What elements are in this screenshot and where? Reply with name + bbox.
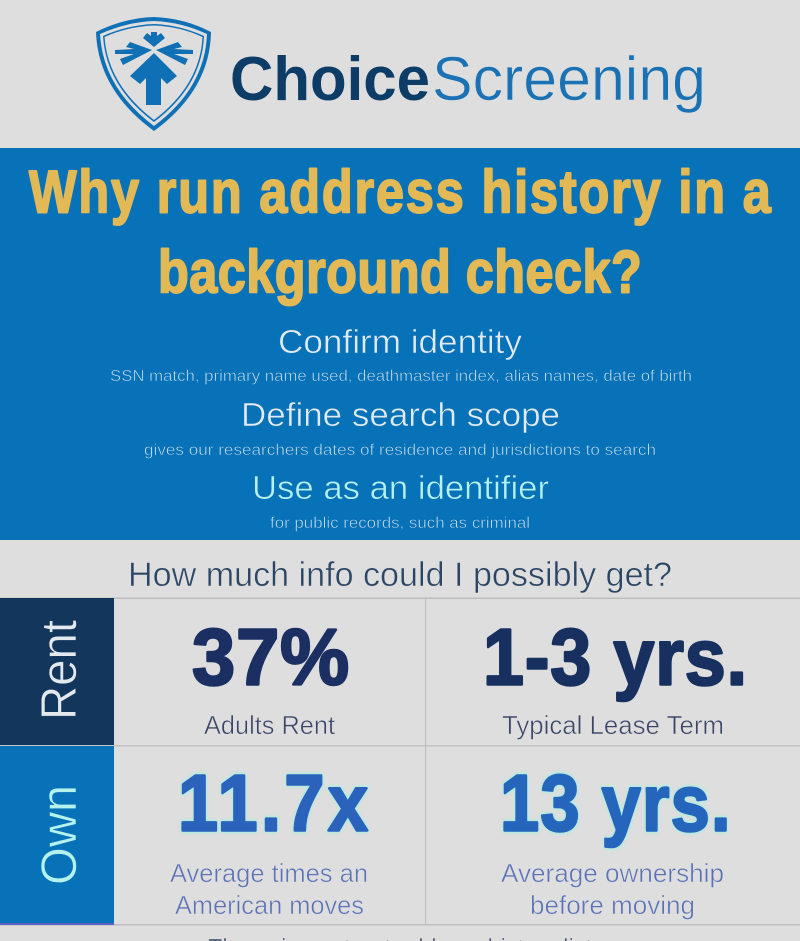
text block: confirm identity: Confirm identity <box>278 323 523 360</box>
stat: adults rent: Adults Rent <box>204 710 336 740</box>
heading: background check? <box>158 238 642 305</box>
stat: lease term: Typical Lease Term <box>502 710 724 740</box>
stat: times an American moves: American moves <box>175 890 364 920</box>
stat: adults rent: 37% <box>192 612 349 702</box>
stat: ownership <box>500 758 731 920</box>
panel: why run address history <box>0 148 800 540</box>
icon: shield <box>96 17 211 131</box>
stat: lease term: 1-3 yrs. <box>483 613 747 702</box>
heading: Why run address history in a <box>29 158 772 225</box>
panel: rent label <box>0 598 114 745</box>
text block: define search scope: Define search scope <box>241 396 560 433</box>
heading <box>29 158 772 305</box>
subheading: How much info could I possibly get? <box>128 556 672 594</box>
panel: rent label: Rent <box>31 620 87 720</box>
panel: own label <box>0 746 114 925</box>
text block: confirm identity <box>110 323 692 385</box>
stat: times an American moves: Average times an <box>170 858 368 888</box>
stat: times an American moves: 11.7x <box>178 759 368 848</box>
header logo <box>96 17 706 131</box>
stat: times an American moves <box>170 759 368 920</box>
stat: ownership: 13 yrs. <box>500 758 731 847</box>
wordmark: Screening <box>432 45 706 114</box>
text block: use as an identifier <box>252 469 549 532</box>
wordmark <box>230 45 706 114</box>
text block: use as an identifier: Use as an identifier <box>252 469 549 506</box>
stat: ownership: before moving <box>530 890 695 920</box>
text block: define search scope: gives our researchers dates of residence and jurisdictions to search <box>144 442 656 459</box>
text block: confirm identity: SSN match, primary name used, deathmaster index, alias names, date of birth <box>110 368 692 385</box>
text block: define search scope <box>144 396 656 459</box>
wordmark: Choice <box>230 45 430 114</box>
text block: use as an identifier: for public records, such as criminal <box>270 515 530 532</box>
panel: own label: Own <box>31 785 87 885</box>
stat: ownership: Average ownership <box>501 858 724 888</box>
